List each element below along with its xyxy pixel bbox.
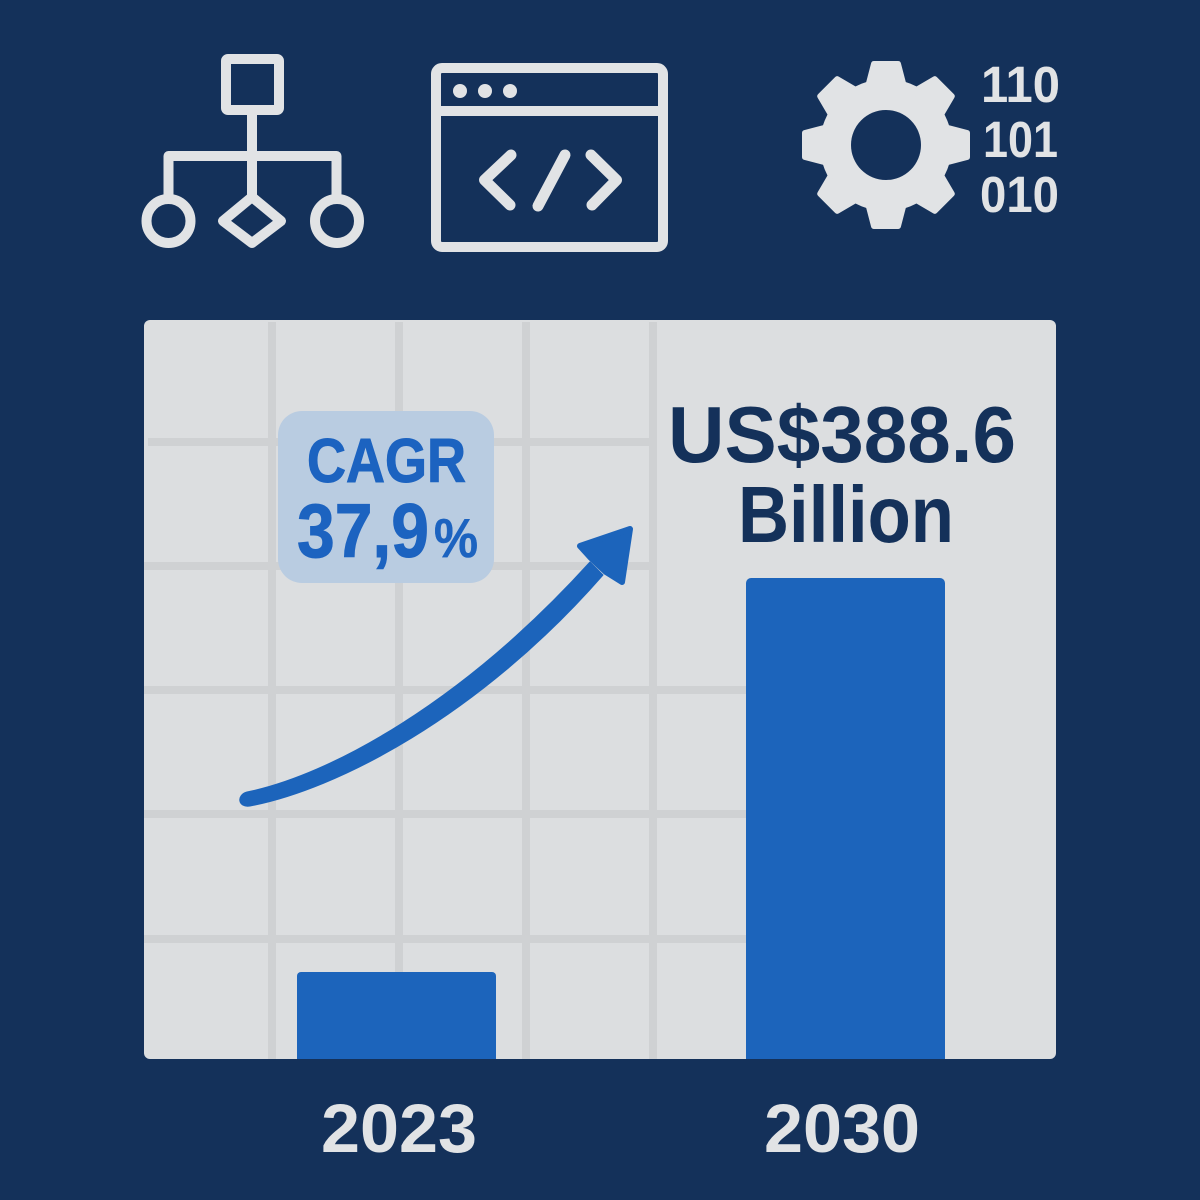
panel: chart — [144, 320, 1056, 1059]
value label: 2030 market size: Billion — [738, 470, 954, 559]
arrow: growth trend — [240, 529, 630, 806]
value label: 2030 market size: US$388.6 — [668, 390, 1016, 479]
icon: flowchart hierarchy — [146, 59, 359, 243]
callout: CAGR: % — [434, 507, 478, 569]
value label: 2030 market size — [668, 390, 1016, 559]
binary digits — [980, 56, 1060, 223]
window frame — [436, 68, 663, 247]
binary digits: 110 — [981, 56, 1060, 113]
callout: CAGR: CAGR — [307, 427, 466, 496]
axis label: 2030: 2030 — [764, 1090, 920, 1167]
icon: code browser window — [436, 68, 663, 247]
binary digits: 010 — [980, 166, 1059, 223]
bar: 2023 — [297, 972, 496, 1059]
icon: gear — [805, 64, 967, 226]
code symbol — [484, 155, 616, 206]
callout: CAGR — [278, 411, 494, 583]
axis label: 2023: 2023 — [321, 1090, 477, 1167]
bar: 2030 — [746, 578, 945, 1059]
binary digits: 101 — [983, 111, 1058, 168]
chart background — [144, 320, 1056, 1059]
callout: CAGR: 37,9 — [297, 489, 429, 574]
window dots — [453, 84, 517, 98]
